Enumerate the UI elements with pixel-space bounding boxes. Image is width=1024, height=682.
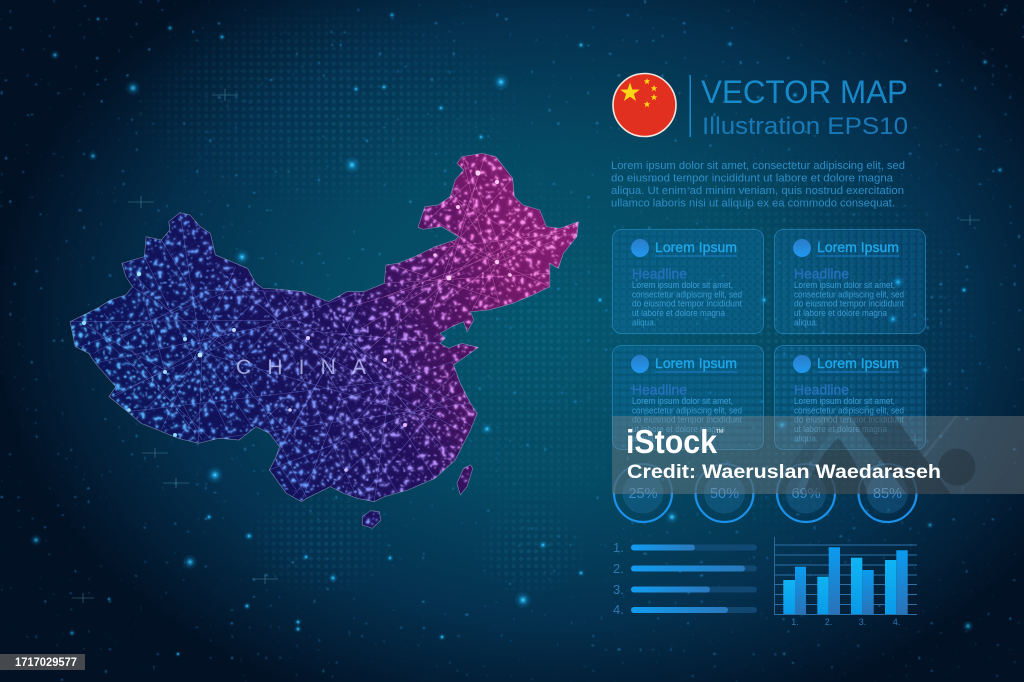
- title: VECTOR MAP: [701, 74, 908, 110]
- horizontal progress bars: [613, 540, 757, 617]
- card headline: Headline: [794, 266, 849, 282]
- card body: Lorem ipsum dolor sit amet,: [794, 396, 895, 406]
- card title: Lorem Ipsum: [655, 240, 737, 255]
- title: Illustration EPS10: [702, 113, 908, 140]
- credit line: Credit: Waeruslan Waedaraseh: [627, 461, 941, 483]
- card headline: Headline: [632, 266, 687, 282]
- bar 2: 2.: [613, 561, 624, 576]
- map shadow glow: [70, 157, 579, 502]
- percentage ring 69%: 69%: [791, 486, 821, 502]
- card body: Lorem ipsum dolor sit amet,: [794, 280, 895, 290]
- title: [701, 74, 908, 140]
- card body: consectetur adipiscing elit, sed: [794, 406, 904, 416]
- intro paragraph: [611, 160, 905, 210]
- card body: ut labore et dolore magna: [632, 308, 726, 318]
- card body: aliqua.: [632, 318, 656, 328]
- card body: aliqua.: [794, 434, 818, 444]
- card icon: [793, 239, 811, 257]
- chart axis labels: [791, 617, 900, 627]
- percentage ring 50%: [696, 464, 754, 522]
- chart axis labels: 3.: [859, 617, 866, 627]
- iStock logo: iStock: [626, 423, 718, 460]
- panel: info card 1: [612, 230, 764, 334]
- China network map: [60, 140, 590, 540]
- image id tag: [0, 654, 85, 670]
- intro paragraph: ullamco laboris nisi ut aliquip ex ea commodo consequat.: [611, 198, 895, 210]
- chart axis labels: 1.: [791, 617, 799, 627]
- card title: Lorem Ipsum: [655, 356, 737, 371]
- card body: consectetur adipiscing elit, sed: [794, 290, 904, 300]
- panel: info card 4: [774, 346, 926, 450]
- flag stars: [620, 78, 657, 107]
- watermark waves: [776, 414, 976, 496]
- network lines: [70, 155, 579, 502]
- bar chart: [774, 537, 917, 627]
- card headline: Headline: [632, 382, 687, 398]
- percentage ring 25%: 25%: [628, 486, 658, 502]
- percentage ring 69%: [777, 464, 835, 522]
- intro paragraph: aliqua. Ut enim ad minim veniam, quis nostrud exercitation: [611, 185, 904, 197]
- card body: do eiusmod tempor incididunt: [632, 298, 742, 308]
- city light dots: [71, 154, 578, 526]
- card icon: [793, 355, 811, 373]
- card title: Lorem Ipsum: [817, 356, 899, 371]
- card body: consectetur adipiscing elit, sed: [632, 290, 742, 300]
- China label: CHINA: [236, 356, 366, 379]
- card body: Lorem ipsum dolor sit amet,: [632, 280, 733, 290]
- image id tag: 1717029577: [15, 657, 77, 669]
- bar 1: [613, 540, 757, 555]
- watermark band: [612, 414, 1024, 496]
- bar 3: [613, 582, 757, 597]
- chart axis labels: 4.: [893, 617, 900, 627]
- percentage ring 85%: [858, 464, 916, 522]
- percentage ring 50%: 50%: [710, 486, 739, 502]
- bar 3: 3.: [613, 582, 624, 597]
- header divider: [690, 75, 691, 137]
- chart axis labels: 2.: [825, 617, 832, 627]
- card body: ut labore et dolore magna: [794, 424, 888, 434]
- map silhouette: [70, 153, 578, 528]
- card body: [632, 280, 742, 328]
- map outline: [70, 153, 579, 528]
- panel: info card 2: [774, 230, 926, 334]
- bright hubs: [82, 170, 512, 472]
- card title: Lorem Ipsum: [817, 240, 899, 255]
- card icon: [631, 355, 649, 373]
- card body: [794, 396, 904, 444]
- flag of China: [613, 74, 676, 136]
- intro paragraph: Lorem ipsum dolor sit amet, consectetur adipiscing elit, sed: [611, 160, 905, 172]
- card body: [794, 280, 904, 328]
- card body: consectetur adipiscing elit, sed: [632, 406, 742, 416]
- card icon: [631, 239, 649, 257]
- bar 4: [613, 602, 757, 617]
- chart bars: [783, 547, 908, 614]
- card body: Lorem ipsum dolor sit amet,: [632, 396, 733, 406]
- iStock logo: TM: [716, 429, 723, 435]
- card body: ut labore et dolore magna: [632, 424, 726, 434]
- panel: info card 3: [612, 346, 764, 450]
- card headline: Headline: [794, 382, 849, 398]
- intro paragraph: do eiusmod tempor incididunt ut labore et dolore magna: [611, 172, 893, 184]
- card body: ut labore et dolore magna: [794, 308, 888, 318]
- percentage ring 25%: [614, 464, 672, 522]
- card body: aliqua.: [794, 318, 818, 328]
- card body: [632, 396, 742, 444]
- percentage ring 85%: 85%: [873, 486, 902, 502]
- bar 2: [613, 561, 757, 576]
- card body: do eiusmod tempor incididunt: [794, 414, 904, 424]
- card body: do eiusmod tempor incididunt: [632, 414, 742, 424]
- bar 1: 1.: [613, 540, 624, 555]
- card body: aliqua.: [632, 434, 656, 444]
- bar 4: 4.: [613, 602, 624, 617]
- card body: do eiusmod tempor incididunt: [794, 298, 904, 308]
